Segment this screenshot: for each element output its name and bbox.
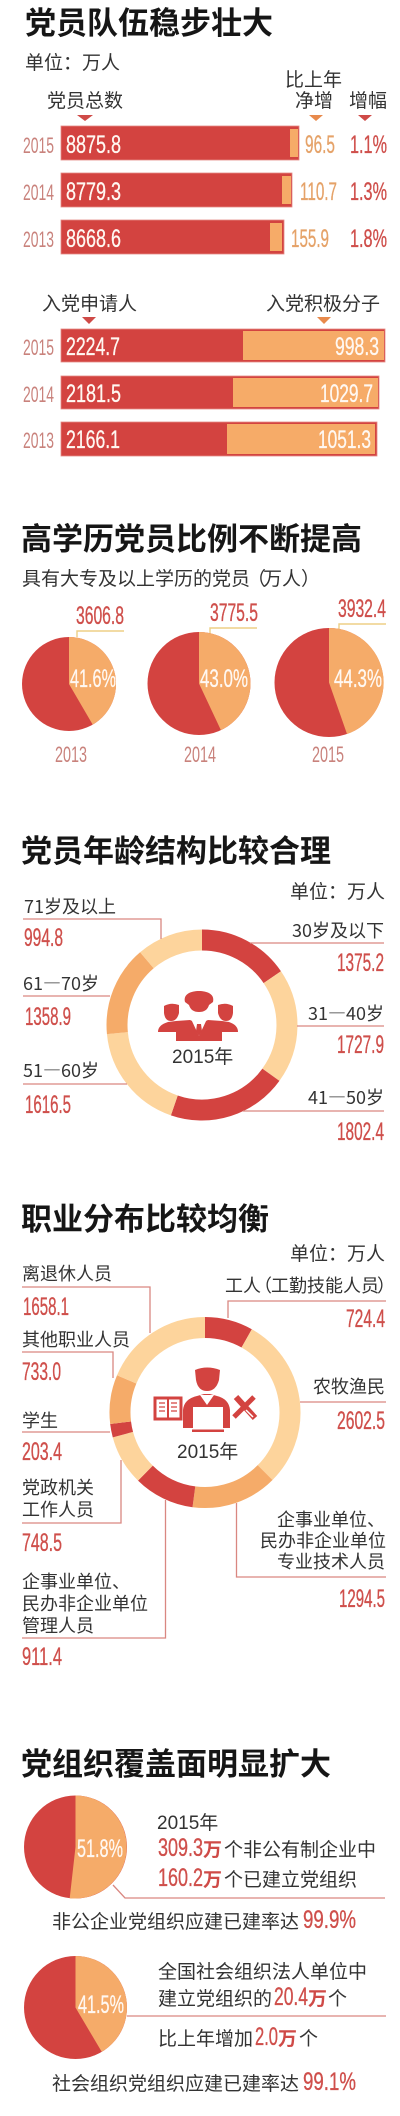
column header: net increase: 净增 bbox=[295, 86, 333, 113]
label: managers: 管理人员 bbox=[22, 1612, 94, 1638]
pie chart 2015: 2015 bbox=[312, 742, 344, 767]
label: other occupations bbox=[22, 1326, 130, 1386]
row 2014 bbox=[23, 173, 387, 207]
unit note: 单位：万人 bbox=[25, 48, 120, 75]
pie chart 2013: 3606.8 bbox=[76, 602, 124, 630]
heading: age structure: 党员年龄结构比较合理 bbox=[21, 826, 331, 871]
row 2013: 2013 bbox=[23, 227, 54, 252]
panel: party member totals bbox=[23, 0, 387, 254]
label: 61 to 70: 1358.9 bbox=[25, 1003, 71, 1031]
text: social organisations: 2.0 bbox=[255, 2023, 278, 2051]
label: professionals: 民办非企业单位 bbox=[260, 1527, 386, 1553]
text: non-public enterprises: 万 bbox=[203, 1835, 222, 1862]
pie chart 2013 bbox=[22, 602, 124, 767]
column header: total members: 党员总数 bbox=[47, 86, 123, 113]
label: 41 to 50: 41—50岁 bbox=[308, 1084, 384, 1110]
label: retired: 1658.1 bbox=[23, 1293, 69, 1321]
panel: applicants and activists bbox=[23, 289, 385, 456]
panel: occupation distribution bbox=[21, 1194, 395, 1671]
label: 71 and above bbox=[23, 893, 161, 952]
row 2014: 110.7 bbox=[300, 178, 337, 206]
label: party and government staff: 工作人员 bbox=[22, 1496, 94, 1522]
heading: coverage: 党组织覆盖面明显扩大 bbox=[21, 1739, 331, 1784]
label: 30 and below: 30岁及以下 bbox=[292, 917, 384, 943]
label: workers bbox=[225, 1272, 395, 1333]
label: workers: ） bbox=[377, 1272, 395, 1298]
text: non-public enterprises: 160.2 bbox=[158, 1864, 203, 1892]
pie chart 2014: 3775.5 bbox=[210, 599, 258, 627]
text: non-public enterprises: 99.9% bbox=[303, 1906, 356, 1934]
panel: party organisation coverage bbox=[21, 1739, 386, 2096]
donut chart: age groups bbox=[117, 940, 287, 1110]
pie chart 2014: 43.0% bbox=[200, 665, 248, 693]
row 2015 bbox=[23, 329, 385, 362]
label: 71 and above: 71岁及以上 bbox=[24, 893, 116, 919]
row 2013: 155.9 bbox=[291, 225, 329, 253]
label: 61 to 70 bbox=[23, 970, 110, 1031]
label: managers: 民办非企业单位 bbox=[22, 1590, 148, 1616]
text: social organisations bbox=[52, 1957, 386, 2096]
column header: applicants: 入党申请人 bbox=[42, 289, 137, 316]
row 2015 bbox=[23, 126, 387, 160]
label: managers: 企事业单位、 bbox=[22, 1568, 130, 1594]
row 2014: 1029.7 bbox=[320, 380, 373, 408]
label: 51 to 60: 51—60岁 bbox=[23, 1057, 99, 1083]
text: social organisations: 个 bbox=[328, 1984, 347, 2011]
icon: worker with book and tools bbox=[155, 1368, 255, 1432]
text: non-public enterprises: 个非公有制企业中 bbox=[224, 1835, 376, 1862]
unit note: 单位：万人 bbox=[290, 877, 385, 904]
label: 61 to 70: 61—70岁 bbox=[23, 970, 99, 996]
text: non-public enterprises bbox=[52, 1812, 385, 1934]
row 2013: 2166.1 bbox=[66, 426, 120, 454]
row 2015: 2015 bbox=[23, 335, 54, 360]
text: social organisations: 99.1% bbox=[303, 2068, 356, 2096]
pie chart 2014: 2014 bbox=[184, 742, 216, 767]
label: party and government staff bbox=[22, 1460, 121, 1557]
label: students bbox=[22, 1407, 110, 1466]
label: party and government staff: 党政机关 bbox=[22, 1474, 94, 1500]
pie chart: social organisations: 41.5% bbox=[78, 1991, 124, 2019]
label: 71 and above: 994.8 bbox=[24, 924, 63, 952]
column header: net increase: 比上年 bbox=[285, 65, 342, 92]
icon: three people bbox=[158, 991, 238, 1041]
row 2015: 96.5 bbox=[305, 131, 335, 159]
text: non-public enterprises: 2015年 bbox=[157, 1812, 218, 1834]
label: retired: 离退休人员 bbox=[22, 1260, 112, 1286]
center label: year: 2015年 bbox=[177, 1441, 238, 1463]
text: non-public enterprises: 309.3 bbox=[158, 1834, 203, 1862]
row 2013 bbox=[23, 220, 387, 254]
row 2015: 998.3 bbox=[335, 333, 379, 361]
label: workers: 工勤技能人员 bbox=[271, 1272, 379, 1298]
row 2014: 2014 bbox=[23, 382, 54, 407]
row 2015: 8875.8 bbox=[66, 131, 121, 159]
row 2013: 2013 bbox=[23, 428, 54, 453]
text: social organisations: 建立党组织的 bbox=[158, 1984, 272, 2011]
label: workers: 工人 bbox=[225, 1272, 261, 1298]
pie chart 2015 bbox=[274, 595, 386, 767]
heading: occupations: 职业分布比较均衡 bbox=[21, 1194, 269, 1239]
subtitle: ） bbox=[301, 564, 320, 591]
pie chart: non-public enterprises: 51.8% bbox=[77, 1835, 123, 1863]
panel: age structure bbox=[21, 826, 385, 1146]
row 2014: 2014 bbox=[23, 180, 54, 205]
label: 31 to 40 bbox=[297, 1000, 384, 1059]
label: managers bbox=[22, 1500, 166, 1671]
label: professionals: 专业技术人员 bbox=[277, 1548, 385, 1574]
column header: growth rate: 增幅 bbox=[349, 86, 387, 113]
label: 31 to 40: 31—40岁 bbox=[308, 1000, 384, 1026]
text: social organisations: 万 bbox=[278, 2024, 297, 2051]
label: 51 to 60: 1616.5 bbox=[25, 1091, 71, 1119]
label: party and government staff: 748.5 bbox=[22, 1529, 62, 1557]
text: social organisations: 全国社会组织法人单位中 bbox=[158, 1957, 367, 1984]
row 2014: 2181.5 bbox=[66, 380, 121, 408]
subtitle: 具有大专及以上学历的党员 bbox=[22, 564, 250, 591]
text: non-public enterprises: 个已建立党组织 bbox=[224, 1865, 357, 1892]
row 2014 bbox=[23, 376, 379, 409]
subtitle: 万人 bbox=[263, 564, 301, 591]
label: workers: （ bbox=[254, 1272, 272, 1298]
label: managers: 911.4 bbox=[22, 1643, 62, 1671]
text: non-public enterprises: 万 bbox=[203, 1865, 222, 1892]
row 2013: 8668.6 bbox=[66, 225, 121, 253]
text: social organisations: 万 bbox=[308, 1984, 327, 2011]
label: 51 to 60 bbox=[23, 1057, 127, 1119]
subtitle: （ bbox=[247, 564, 266, 591]
pie chart 2013: 41.6% bbox=[70, 665, 116, 693]
text: non-public enterprises: 非公企业党组织应建已建率达 bbox=[52, 1907, 299, 1934]
row 2013 bbox=[23, 422, 377, 456]
label: 41 to 50 bbox=[243, 1084, 384, 1146]
label: farmers: 农牧渔民 bbox=[313, 1373, 385, 1399]
center label: year: 2015年 bbox=[172, 1046, 233, 1068]
text: social organisations: 个 bbox=[299, 2024, 318, 2051]
pie chart 2013: 2013 bbox=[55, 742, 87, 767]
text: social organisations: 20.4 bbox=[274, 1983, 308, 2011]
column header: activists: 入党积极分子 bbox=[266, 289, 380, 316]
text: social organisations: 比上年增加 bbox=[158, 2024, 253, 2051]
column header: net increase bbox=[285, 65, 342, 121]
panel: higher education bbox=[21, 514, 386, 767]
label: professionals: 企事业单位、 bbox=[277, 1506, 385, 1532]
row 2015: 2015 bbox=[23, 133, 54, 158]
heading: higher education: 高学历党员比例不断提高 bbox=[21, 514, 362, 559]
label: students: 203.4 bbox=[22, 1438, 62, 1466]
pie chart: non-public enterprises bbox=[24, 1796, 127, 1898]
label: 30 and below bbox=[250, 917, 384, 977]
label: professionals bbox=[236, 1503, 386, 1613]
label: retired bbox=[22, 1260, 150, 1333]
donut chart: occupations bbox=[120, 1328, 290, 1498]
row 2014: 8779.3 bbox=[66, 178, 121, 206]
row 2013: 1051.3 bbox=[318, 426, 371, 454]
text: social organisations: 社会组织党组织应建已建率达 bbox=[52, 2069, 299, 2096]
label: farmers bbox=[300, 1373, 386, 1435]
label: students: 学生 bbox=[22, 1407, 58, 1433]
unit note: 单位：万人 bbox=[290, 1239, 385, 1266]
label: other occupations: 其他职业人员 bbox=[22, 1326, 130, 1352]
pie chart 2014 bbox=[148, 599, 258, 767]
row 2015: 2224.7 bbox=[66, 333, 120, 361]
pie chart: social organisations bbox=[24, 1956, 127, 2059]
label: other occupations: 733.0 bbox=[22, 1358, 61, 1386]
